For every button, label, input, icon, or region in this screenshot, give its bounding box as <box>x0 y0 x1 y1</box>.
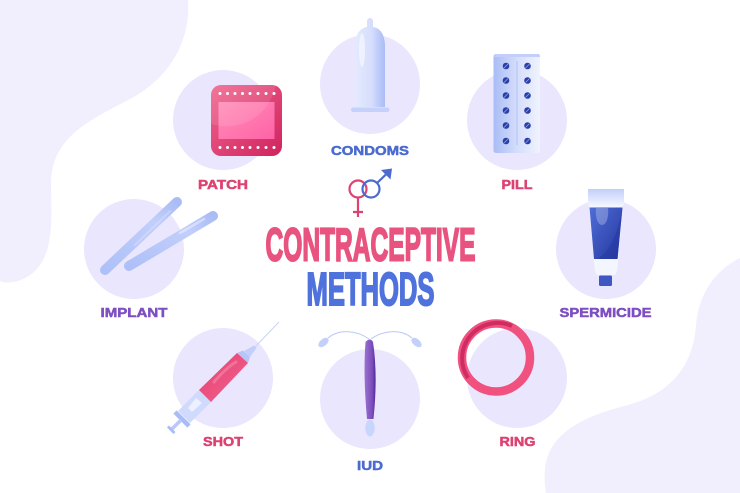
label: ring: RING <box>500 434 536 449</box>
title line: methods: METHODS <box>306 263 434 315</box>
panel: shot <box>168 322 279 449</box>
icon: iud <box>317 332 423 436</box>
label: implant: IMPLANT <box>100 305 168 320</box>
icon: syringe <box>168 322 279 433</box>
icon: blister pack <box>494 54 540 153</box>
label: pill: PILL <box>502 177 533 192</box>
panel: implant <box>84 199 213 320</box>
title <box>266 218 476 315</box>
icon: tube <box>588 189 624 286</box>
background blob: top left <box>0 0 188 282</box>
panel: pill <box>467 54 567 192</box>
panel: spermicide <box>556 189 656 320</box>
label: patch: PATCH <box>198 177 248 192</box>
label: shot: SHOT <box>203 434 243 449</box>
icon: condom <box>351 18 390 112</box>
panel: iud <box>317 332 423 473</box>
label: spermicide: SPERMICIDE <box>560 305 652 320</box>
title line: contraceptive: CONTRACEPTIVE <box>266 218 476 270</box>
icon: patch <box>211 85 282 156</box>
icon: ring <box>462 323 530 392</box>
panel: patch <box>173 70 282 192</box>
label: condoms: CONDOMS <box>331 143 409 158</box>
icon: gender symbols <box>350 168 392 217</box>
panel: ring <box>462 323 567 449</box>
panel: condoms <box>320 18 420 158</box>
label: iud: IUD <box>357 458 383 473</box>
background blob: bottom right <box>545 258 740 493</box>
icon: implant rods <box>105 202 213 270</box>
